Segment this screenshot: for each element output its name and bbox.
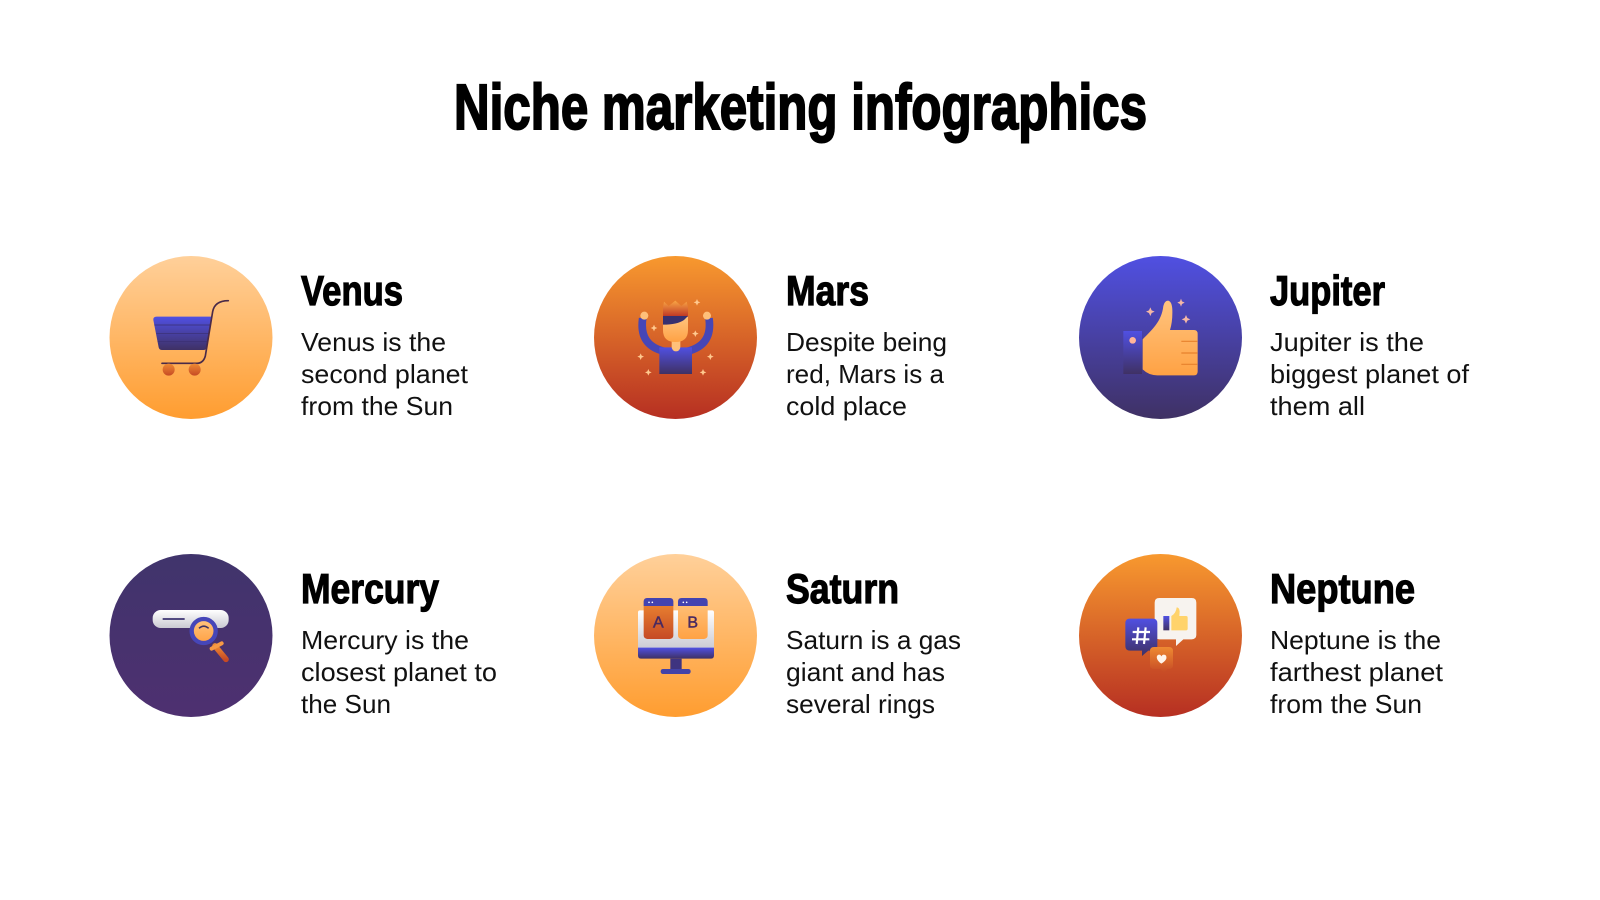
icon: A/B test monitor: A xyxy=(653,615,664,632)
icon circle: Saturn xyxy=(594,554,757,717)
icon: A/B test monitor: B xyxy=(687,615,698,632)
text: Jupiter description: them all xyxy=(1270,391,1365,421)
text: Neptune description: Neptune is the xyxy=(1270,625,1441,655)
heading: Mars: Mars xyxy=(786,267,869,314)
text: Mercury description: Mercury is the xyxy=(301,625,469,655)
text: Jupiter description: Jupiter is the xyxy=(1270,327,1424,357)
icon: thumbs up xyxy=(1123,299,1198,375)
icon circle: Neptune xyxy=(1079,554,1242,717)
text: Neptune description xyxy=(1270,625,1444,719)
panel: Jupiter xyxy=(1079,256,1470,421)
heading: Venus: Venus xyxy=(301,267,403,314)
heading: Neptune: Neptune xyxy=(1270,565,1415,612)
text: Neptune description: from the Sun xyxy=(1270,689,1422,719)
text: Saturn description: Saturn is a gas xyxy=(786,625,961,655)
panel: Mercury xyxy=(110,554,497,719)
text: Saturn description xyxy=(786,625,961,719)
icon: shopping cart xyxy=(153,301,228,376)
icon circle: Mercury xyxy=(110,554,272,717)
panel: Mars xyxy=(594,256,947,421)
text: Saturn description: several rings xyxy=(786,689,935,719)
text: Mars description: red, Mars is a xyxy=(786,359,945,389)
panel: Neptune xyxy=(1079,554,1444,719)
text: Venus description: from the Sun xyxy=(301,391,453,421)
panel: Venus xyxy=(110,256,469,421)
panel: Saturn xyxy=(594,554,961,719)
heading: Mercury: Mercury xyxy=(301,565,440,612)
icon circle: Venus xyxy=(110,256,272,419)
text: Venus description: Venus is the xyxy=(301,327,446,357)
text: Venus description: second planet xyxy=(301,359,469,389)
text: Mars description xyxy=(786,327,947,421)
text: Mercury description xyxy=(301,625,497,719)
icon: search bar with magnifier xyxy=(153,610,229,659)
text: Mercury description: closest planet to xyxy=(301,657,497,687)
heading: Jupiter: Jupiter xyxy=(1270,267,1385,314)
text: Saturn description: giant and has xyxy=(786,657,945,687)
icon: social media bubbles xyxy=(1125,598,1196,673)
text: Jupiter description xyxy=(1270,327,1470,421)
text: Mercury description: the Sun xyxy=(301,689,391,719)
heading: Saturn: Saturn xyxy=(786,565,899,612)
icon: A/B test monitor xyxy=(638,598,714,674)
title: Niche marketing infographics xyxy=(454,71,1147,143)
text: Jupiter description: biggest planet of xyxy=(1270,359,1470,389)
text: Mars description: Despite being xyxy=(786,327,947,357)
icon: celebrating person xyxy=(637,299,714,376)
text: Venus description xyxy=(301,327,469,421)
text: Neptune description: farthest planet xyxy=(1270,657,1444,687)
text: Mars description: cold place xyxy=(786,391,907,421)
icon circle: Mars xyxy=(594,256,757,419)
icon circle: Jupiter xyxy=(1079,256,1242,419)
